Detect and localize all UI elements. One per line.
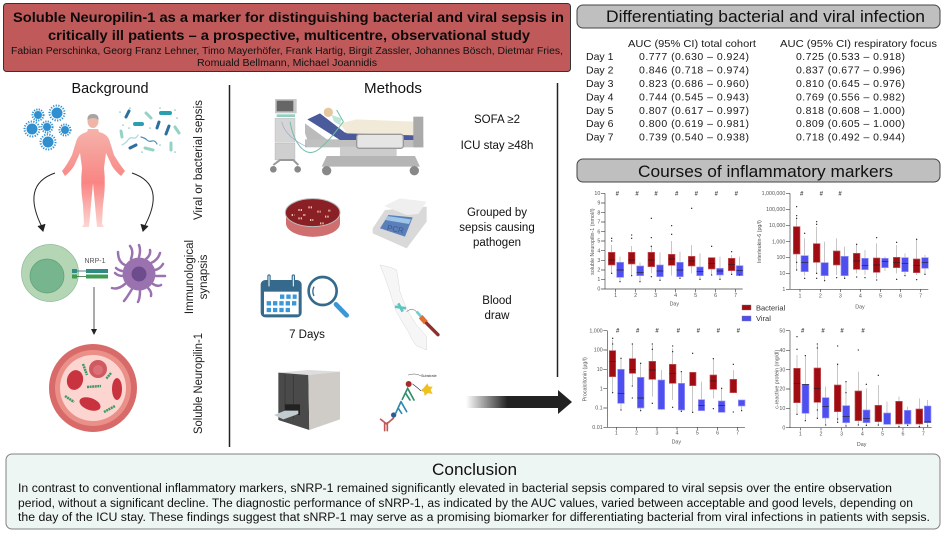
legend: Bacterial [756,304,786,312]
AUC table text: 0.837 (0.677 – 0.996) [796,64,905,76]
chart: soluble neuropilin-1: 1 [614,293,617,299]
AUC table text: 0.823 (0.686 – 0.960) [639,78,749,90]
chart: soluble neuropilin-1: 3 [597,258,600,264]
chart: procalcitonin: 1 [615,431,618,437]
chart: interleukin-6: 100 [776,255,785,261]
chart: C-reactive protein: 20 [779,387,785,393]
chart: soluble neuropilin-1: 5 [694,293,697,299]
chart: C-reactive protein: 50 [779,328,785,334]
divider left [228,85,230,447]
chart: interleukin-6: # [820,192,824,198]
chart: interleukin-6: 10 [779,271,785,277]
chart: procalcitonin: 5 [696,431,699,437]
AUC table text: Day 1 [586,51,614,63]
chart: procalcitonin: # [717,329,721,335]
chart: procalcitonin: 7 [736,431,739,437]
AUC table text: 0.809 (0.605 – 1.000) [796,118,905,130]
chart: interleukin-6: 7 [919,294,922,300]
AUC table text: 0.777 (0.630 – 0.924) [639,51,749,63]
chart: soluble neuropilin-1: 6 [714,293,717,299]
chart: procalcitonin: 6 [716,431,719,437]
chart: procalcitonin: # [616,329,620,335]
title: critically ill patients – a prospective, multicentre, observational study [48,28,531,43]
authors: Romuald Bellmann, Michael Joannidis [197,58,377,69]
AUC table text: Day 2 [586,64,614,76]
icon: PCR machine [373,198,427,248]
chart: C-reactive protein: 0 [782,425,785,431]
arrow: human to cell right [132,173,153,231]
chart: soluble neuropilin-1: 5 [597,239,600,245]
text: grouped by pathogen: pathogen [473,237,521,249]
chart: procalcitonin: 1 [600,386,603,392]
text: 7 days: 7 Days [289,329,325,341]
chart: interleukin-6: Interleukin-6 (pg/l) [757,220,763,263]
heading: differentiating bacterial and viral infection: Differentiating bacterial and viral infection [606,7,925,26]
heading: courses of inflammatory markers: Courses of inflammatory markers [638,162,893,181]
chart: C-reactive protein: 10 [779,406,785,412]
chart: soluble neuropilin-1: Day [670,302,679,308]
conclusion text [18,483,930,524]
divider right [556,83,558,377]
label: soluble neuropilin-1: Soluble Neuropilin-1 [193,333,205,434]
chart: soluble neuropilin-1: 9 [597,201,600,207]
text: blood draw: draw [485,310,510,322]
chart: procalcitonin: Day [672,440,681,446]
icon: calendar and magnifier [261,276,347,317]
chart: soluble neuropilin-1: 8 [597,210,600,216]
legend: Viral [756,314,771,323]
chart: soluble neuropilin-1 [590,191,743,308]
chart: interleukin-6: 3 [839,294,842,300]
authors: Fabian Perschinka, Georg Franz Lehner, Timo Mayerhöfer, Frank Hartig, Birgit Zassler, Johannes Bösch, Dietmar Fries, [11,46,563,57]
AUC table text: 0.739 (0.540 – 0.938) [639,132,749,144]
icon: ELISA antibody: Substrate [421,374,437,378]
chart: procalcitonin: # [677,329,681,335]
chart: procalcitonin [583,328,745,446]
chart: soluble neuropilin-1: # [635,192,639,198]
chart: C-reactive protein: 1 [799,432,802,438]
icon: NRP-1 receptor: NRP-1 [84,258,106,265]
chart: interleukin-6: 1,000 [772,239,785,245]
conclusion text: In contrast to conventional inflammatory markers, sNRP-1 remained significantly elevated in bacterial sepsis compared to viral sepsis over the entire observation [18,483,892,495]
authors [11,46,563,69]
AUC table text: 0.810 (0.645 – 0.976) [796,78,905,90]
chart: C-reactive protein: 3 [840,432,843,438]
AUC table text: 0.718 (0.492 – 0.944) [796,132,905,144]
chart: procalcitonin: 2 [635,431,638,437]
chart: C-reactive protein: # [861,329,865,335]
AUC table text: 0.807 (0.617 – 0.997) [639,105,749,117]
text: grouped by pathogen: sepsis causing [459,222,535,234]
chart: C-reactive protein: 5 [881,432,884,438]
title [13,10,564,43]
icon: petri dish [285,199,340,237]
chart: procalcitonin: 100 [594,348,603,354]
icon: bacteria [120,108,179,152]
AUC table text: AUC (95% CI) total cohort [628,38,756,50]
chart: soluble neuropilin-1: # [616,192,620,198]
chart: soluble neuropilin-1: 7 [734,293,737,299]
icon: ELISA antibody [381,374,437,431]
chart: soluble neuropilin-1: 0 [597,287,600,293]
text: SOFA and ICU stay criteria [461,114,533,152]
icon: dendritic cell [112,245,165,302]
chart: C-reactive protein: 7 [922,432,925,438]
chart: soluble neuropilin-1: 1 [597,277,600,283]
chart: soluble neuropilin-1: 3 [654,293,657,299]
chart: C-reactive protein: 4 [861,432,864,438]
AUC table text: 0.725 (0.533 – 0.918) [796,51,905,63]
title: Soluble Neuropilin-1 as a marker for distinguishing bacterial and viral sepsis in [13,10,564,25]
legend [742,304,786,323]
conclusion text: the day of the ICU stay. These findings suggest that sNRP-1 may serve as a promising biomarker for differentiating bacterial from viral infections in patients with sepsis. [18,512,930,524]
label: viral or bacterial sepsis: Viral or bacterial sepsis [193,100,205,220]
AUC table text [586,38,937,144]
chart: C-reactive protein: Day [857,442,867,448]
chart: C-reactive protein [775,328,932,448]
icon: viruses [24,106,70,150]
icon: T cell [22,244,78,302]
text: grouped by pathogen [459,207,535,249]
chart: procalcitonin: 3 [656,431,659,437]
label: immunological synapsis: synapsis [198,254,210,299]
chart: procalcitonin: 1,000 [589,328,603,334]
chart: soluble neuropilin-1: 6 [597,229,600,235]
arrow: human to cell left [34,173,55,231]
chart: procalcitonin: # [636,329,640,335]
text: blood draw [482,295,512,322]
chart: soluble neuropilin-1: 7 [597,220,600,226]
panel: AUC table [577,5,940,144]
chart: interleukin-6: 10,000 [769,223,785,229]
AUC table text: 0.818 (0.608 – 1.000) [796,105,905,117]
AUC table text: Day 7 [586,132,614,144]
chart: C-reactive protein: 40 [779,348,785,354]
chart: procalcitonin: 4 [676,431,679,437]
AUC table text: 0.769 (0.556 – 0.982) [796,92,905,104]
chart: C-reactive protein: c-reactive protein (mg/dl) [775,350,781,409]
chart: interleukin-6: 6 [899,294,902,300]
chart: procalcitonin: Procalcitonin (µg/l) [583,357,589,401]
chart: procalcitonin: # [697,329,701,335]
title banner [4,4,570,72]
arrow: cell to vessel [91,287,97,335]
AUC table text: AUC (95% CI) respiratory focus [780,38,937,50]
text: SOFA and ICU stay criteria: ICU stay ≥48h [461,140,533,152]
chart: interleukin-6: 1 [799,294,802,300]
AUC table text: 0.744 (0.545 – 0.943) [639,92,749,104]
chart: C-reactive protein: # [840,329,844,335]
chart: soluble neuropilin-1: # [715,192,719,198]
chart: procalcitonin: # [655,329,659,335]
arrow: methods to results [466,390,572,414]
text: grouped by pathogen: Grouped by [467,207,527,219]
icon: PCR machine: PCR [386,223,405,235]
chart: C-reactive protein: 30 [779,367,785,373]
text: blood draw: Blood [482,295,512,307]
heading: background: Background [72,80,148,97]
AUC table text: Day 4 [586,92,614,104]
chart: interleukin-6: # [838,192,842,198]
chart: procalcitonin: 10 [597,367,603,373]
chart: soluble neuropilin-1: 4 [597,248,600,254]
panel: conclusion [6,454,940,529]
chart: interleukin-6: 2 [819,294,822,300]
chart: interleukin-6: 4 [859,294,862,300]
chart: interleukin-6: 1 [782,287,785,293]
chart: interleukin-6: 1,000,000 [762,191,785,197]
AUC table text: Day 6 [586,118,614,130]
chart: procalcitonin: # [737,329,741,335]
AUC table text: 0.846 (0.718 – 0.974) [639,64,749,76]
chart: C-reactive protein: # [801,329,805,335]
label: immunological synapsis: Immunological [184,240,196,314]
chart: interleukin-6: 5 [879,294,882,300]
chart: soluble neuropilin-1: # [735,192,739,198]
chart: procalcitonin: 0.01 [592,425,603,431]
chart: soluble neuropilin-1: 4 [674,293,677,299]
chart: soluble neuropilin-1: 10 [594,191,600,197]
chart: interleukin-6: # [800,192,804,198]
icon: blood vessel [49,344,137,432]
chart: soluble neuropilin-1: # [675,192,679,198]
conclusion text: period, without a significant decline. The diagnostic performance of sNRP-1, as indicated by the AUC values, varied between acceptable and good levels, depending on [18,498,913,510]
AUC table text: Day 3 [586,78,614,90]
chart: interleukin-6: 100,000 [766,207,785,213]
chart: soluble neuropilin-1: 2 [634,293,637,299]
chart: procalcitonin: 0.1 [595,406,603,412]
text: SOFA and ICU stay criteria: SOFA ≥2 [474,114,520,126]
icon: ICU bed and ventilator [270,99,423,175]
chart: interleukin-6: Day [855,304,865,310]
chart: C-reactive protein: # [821,329,825,335]
chart: C-reactive protein: 2 [820,432,823,438]
heading: methods: Methods [364,80,422,97]
AUC table text: Day 5 [586,105,614,117]
chart: soluble neuropilin-1: soluble Neuropilin-1 (nmol/l) [590,208,596,275]
chart: soluble neuropilin-1: # [695,192,699,198]
heading: courses of inflammatory markers [577,159,940,182]
chart: interleukin-6 [757,191,928,310]
icon: plate reader [274,370,340,430]
AUC table text: 0.800 (0.619 – 0.981) [639,118,749,130]
chart: soluble neuropilin-1: 2 [597,268,600,274]
chart: C-reactive protein: 6 [902,432,905,438]
label: immunological synapsis [184,240,210,314]
chart: soluble neuropilin-1: # [654,192,658,198]
icon: arm blood draw [380,265,438,350]
icon: NRP-1 receptor [72,258,108,278]
icon: human figure [62,114,125,227]
heading: conclusion: Conclusion [432,460,517,479]
